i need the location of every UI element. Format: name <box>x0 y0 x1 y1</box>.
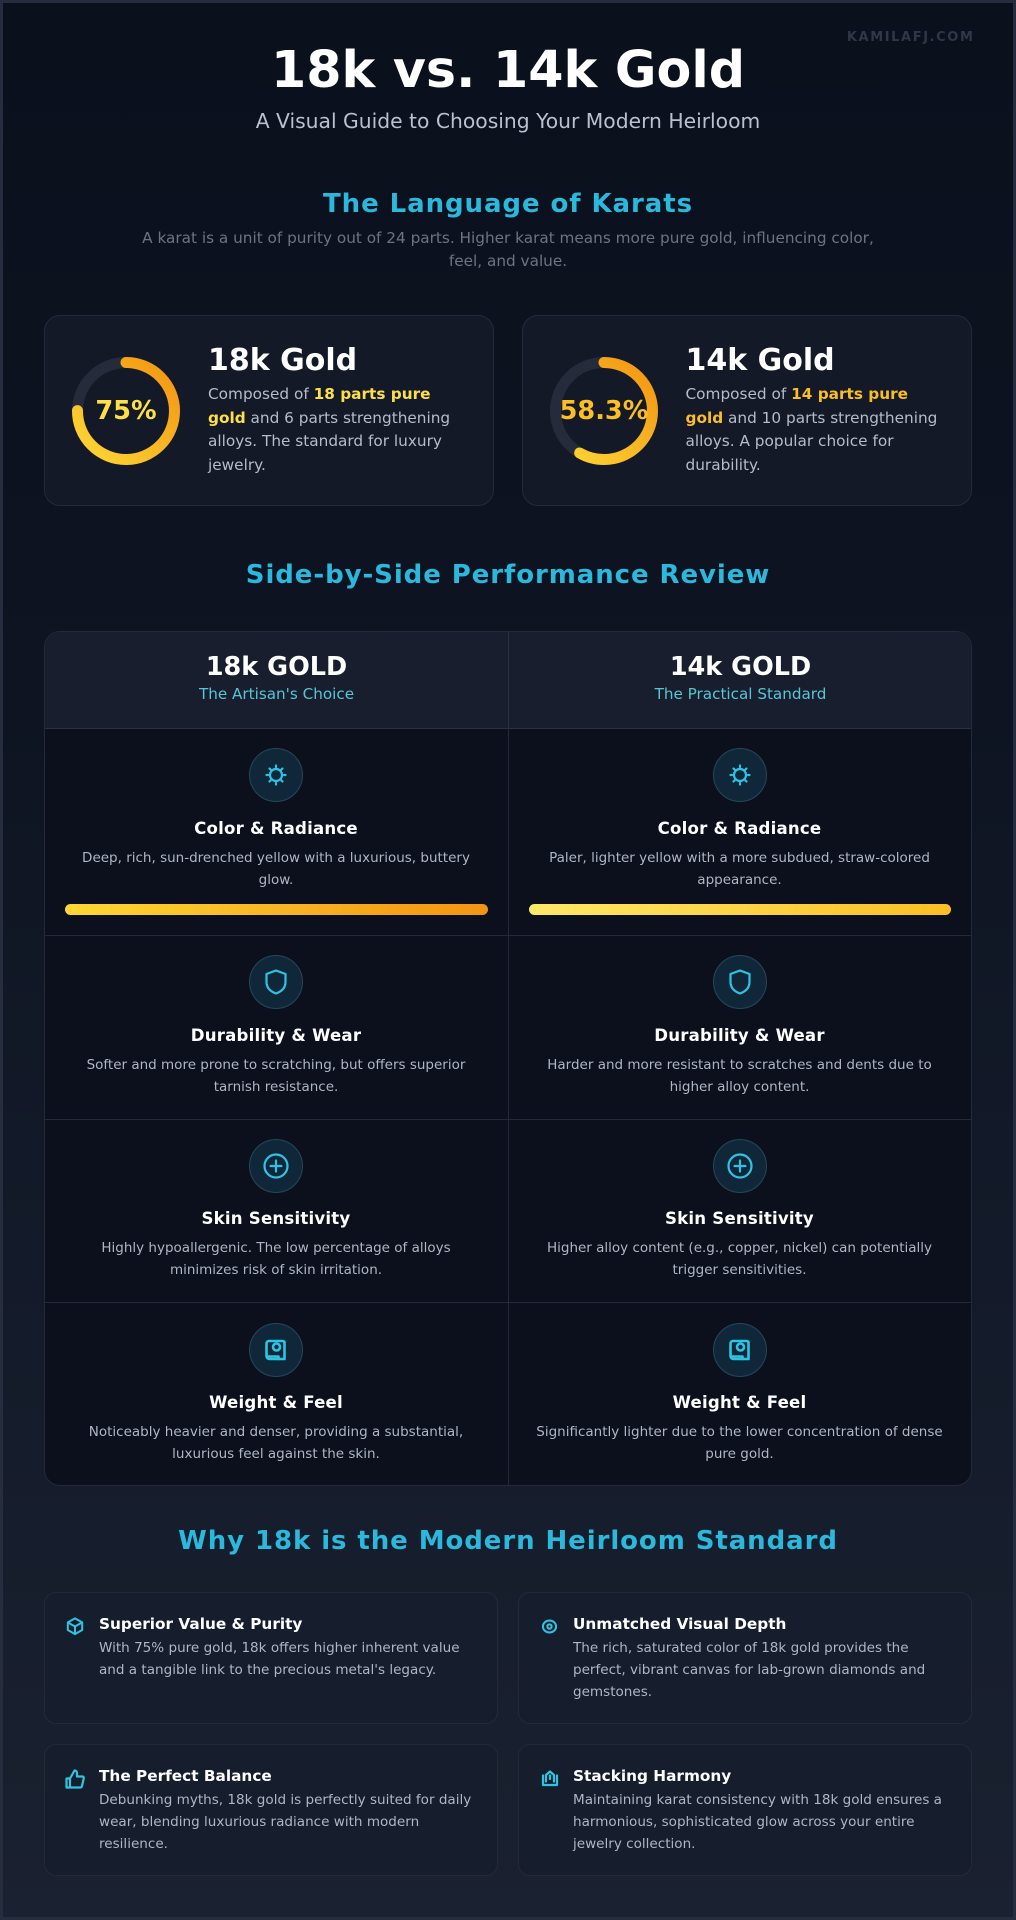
card text: jewelry collection. <box>573 1836 695 1852</box>
row: skin sensitivity 14k <box>547 1139 932 1278</box>
row: color & radiance 18k <box>65 748 488 915</box>
icon: sun <box>249 748 303 802</box>
icon: shield <box>713 955 767 1009</box>
heading: the language of karats: The Language of Karats <box>323 189 693 219</box>
card text: harmonious, sophisticated glow across your entire <box>573 1814 914 1830</box>
icon: weight <box>249 1323 303 1377</box>
row description: Softer and more prone to scratching, but offers superior <box>87 1056 465 1072</box>
description: gold and 6 parts strengthening <box>208 409 450 427</box>
card title: The Perfect Balance <box>99 1766 272 1784</box>
card text: resilience. <box>99 1836 168 1852</box>
row description <box>549 850 930 888</box>
intro text: feel, and value. <box>449 252 567 270</box>
row title: Skin Sensitivity <box>202 1208 350 1228</box>
row title: Weight & Feel <box>673 1392 806 1412</box>
row title: Durability & Wear <box>654 1026 825 1044</box>
intro text <box>142 228 874 270</box>
card text: The rich, saturated color of 18k gold provides the <box>573 1640 909 1656</box>
row description <box>89 1424 463 1462</box>
card text: Debunking myths, 18k gold is perfectly suited for daily <box>99 1792 471 1808</box>
row description: luxurious feel against the skin. <box>172 1446 380 1462</box>
column subtitle: The Practical Standard <box>655 685 826 703</box>
card text <box>572 1640 925 1700</box>
row title: Color & Radiance <box>658 818 821 838</box>
table header: 18k <box>45 632 509 729</box>
row description <box>101 1240 451 1278</box>
row description: Significantly lighter due to the lower concentration of dense <box>536 1424 943 1440</box>
row description: Higher alloy content (e.g., copper, nickel) can potentially <box>547 1240 932 1256</box>
row title: Color & Radiance <box>194 818 358 838</box>
icon: thumbs up <box>65 1769 85 1789</box>
row title: Durability & Wear <box>191 1026 361 1044</box>
row description: tarnish resistance. <box>214 1078 338 1094</box>
icon: plus circle <box>249 1139 303 1193</box>
row: skin sensitivity 18k <box>101 1139 451 1278</box>
card text: With 75% pure gold, 18k offers higher inherent value <box>99 1640 460 1656</box>
card title: Unmatched Visual Depth <box>573 1614 786 1632</box>
row: color & radiance 14k <box>529 748 951 915</box>
description <box>208 385 450 474</box>
card text: and a tangible link to the precious metal's legacy. <box>99 1662 436 1678</box>
panel: 14k gold card <box>522 315 972 506</box>
column title: 14k GOLD <box>670 652 811 682</box>
icon: weight <box>713 1323 767 1377</box>
description: Composed of 14 parts pure <box>686 385 908 403</box>
panel: superior value & purity <box>44 1592 498 1724</box>
chart: 58.3% ring <box>550 357 658 465</box>
panel: comparison table <box>44 631 972 1486</box>
row description <box>547 1056 932 1094</box>
subtitle: A Visual Guide to Choosing Your Modern Heirloom <box>256 109 760 133</box>
row description: higher alloy content. <box>670 1078 809 1094</box>
title: 18k vs. 14k Gold <box>271 40 745 99</box>
chart: 58.3% ring: 58.3% <box>560 396 648 426</box>
description: alloys. The standard for luxury <box>208 432 442 450</box>
icon: stacked house <box>542 1770 558 1786</box>
description: jewelry. <box>208 456 266 474</box>
row description: Paler, lighter yellow with a more subdued, straw-colored <box>549 850 930 866</box>
card text <box>572 1792 942 1852</box>
row description: Highly hypoallergenic. The low percentage of alloys <box>101 1240 451 1256</box>
icon: plus circle <box>713 1139 767 1193</box>
row description: Deep, rich, sun-drenched yellow with a luxurious, buttery <box>82 850 470 866</box>
color bar: deep yellow <box>65 904 488 915</box>
card title: Stacking Harmony <box>573 1766 731 1784</box>
card text: gemstones. <box>573 1684 652 1700</box>
description: Composed of 18 parts pure <box>208 385 431 403</box>
row: durability & wear 14k <box>547 955 932 1094</box>
card text: perfect, vibrant canvas for lab-grown diamonds and <box>573 1662 925 1678</box>
row title: Skin Sensitivity <box>665 1208 814 1228</box>
chart: 75% ring: 75% <box>95 396 157 426</box>
column subtitle: The Artisan's Choice <box>199 685 354 703</box>
icon: sun <box>713 748 767 802</box>
panel: the perfect balance <box>44 1744 498 1876</box>
icon: target eye <box>542 1620 558 1634</box>
watermark: KAMILAFJ.COM <box>847 30 974 45</box>
table header: 14k <box>509 632 973 729</box>
heading: side-by-side performance review: Side-by-Side Performance Review <box>246 560 770 590</box>
card title: Superior Value & Purity <box>99 1614 302 1632</box>
row description: pure gold. <box>705 1446 774 1462</box>
row description: appearance. <box>697 872 782 888</box>
row: durability & wear 18k <box>87 955 466 1094</box>
icon: cube <box>66 1617 84 1636</box>
row description: Harder and more resistant to scratches and dents due to <box>547 1056 932 1072</box>
row description: Noticeably heavier and denser, providing a substantial, <box>89 1424 463 1440</box>
description: durability. <box>686 456 761 474</box>
row description <box>536 1424 943 1462</box>
row description <box>82 850 470 888</box>
row description <box>547 1240 932 1278</box>
heading: 14k gold: 14k Gold <box>686 342 835 378</box>
heading: why 18k: Why 18k is the Modern Heirloom Standard <box>178 1526 838 1556</box>
row title: Weight & Feel <box>209 1392 343 1412</box>
row description: trigger sensitivities. <box>672 1262 807 1278</box>
panel: unmatched visual depth <box>518 1592 972 1724</box>
row: weight & feel 18k <box>89 1323 463 1462</box>
icon: shield <box>249 955 303 1009</box>
card text <box>99 1640 460 1678</box>
heading: 18k gold: 18k Gold <box>208 342 357 378</box>
row description: minimizes risk of skin irritation. <box>170 1262 382 1278</box>
description <box>686 385 937 474</box>
card text: wear, blending luxurious radiance with modern <box>99 1814 419 1830</box>
card text: Maintaining karat consistency with 18k gold ensures a <box>573 1792 942 1808</box>
intro text: A karat is a unit of purity out of 24 parts. Higher karat means more pure gold, influencing color, <box>142 228 874 246</box>
panel: 18k gold card <box>44 315 494 506</box>
row: weight & feel 14k <box>536 1323 943 1462</box>
row description <box>87 1056 466 1094</box>
description: alloys. A popular choice for <box>686 432 894 450</box>
row description: glow. <box>259 872 293 888</box>
description: gold and 10 parts strengthening <box>686 409 937 427</box>
panel: stacking harmony <box>518 1744 972 1876</box>
color bar: pale yellow <box>529 904 951 915</box>
chart: 75% ring <box>72 357 180 465</box>
card text <box>99 1792 471 1852</box>
column title: 18k GOLD <box>206 652 347 682</box>
